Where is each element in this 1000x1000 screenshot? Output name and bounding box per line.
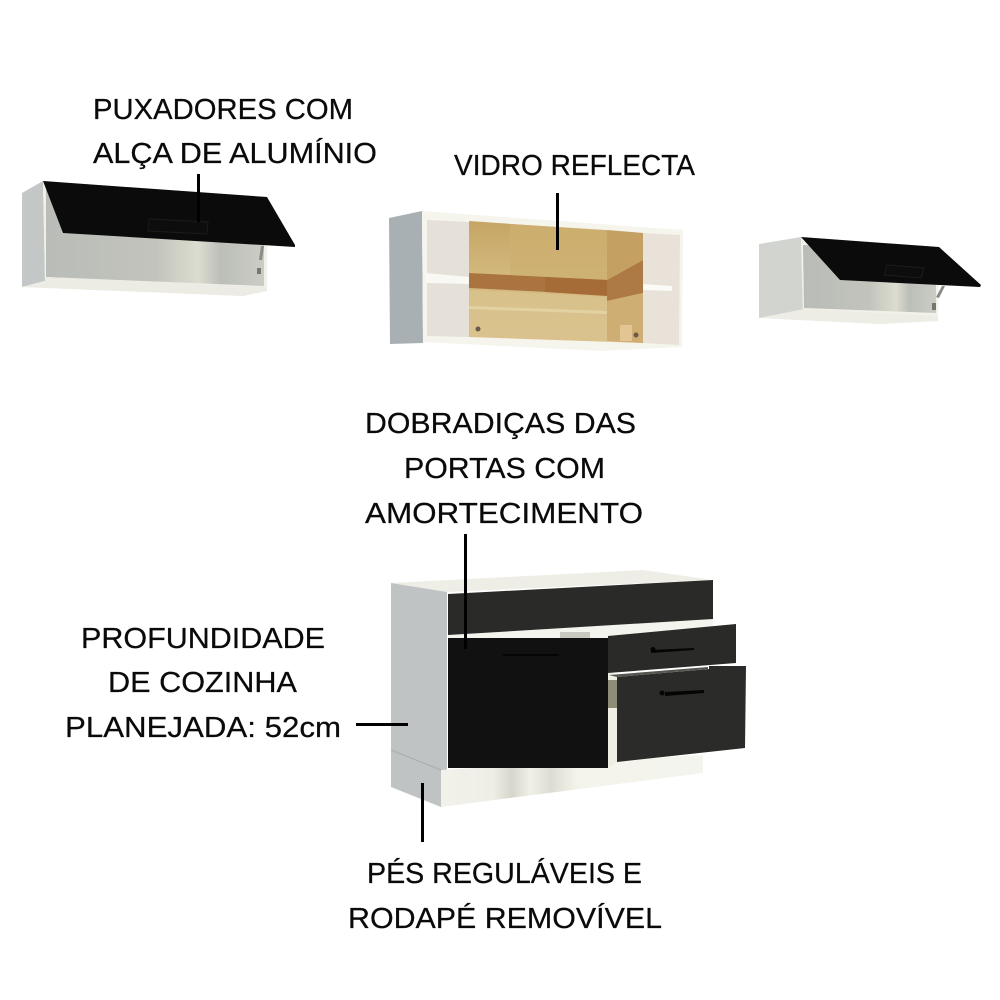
leader line: hinges	[464, 534, 467, 649]
label: hinges: PORTAS COM	[404, 453, 605, 485]
label: feet: RODAPÉ REMOVÍVEL	[348, 902, 662, 935]
label: feet	[348, 857, 662, 935]
leader line: depth	[356, 723, 408, 726]
label: handles: ALÇA DE ALUMÍNIO	[93, 137, 377, 170]
cabinet: left wall unit with lift-up door	[22, 181, 295, 296]
label: depth: DE COZINHA	[108, 667, 298, 699]
label: handles: PUXADORES COM	[93, 94, 353, 126]
cabinet: centre glass wall unit	[389, 211, 683, 351]
label: depth: PROFUNDIDADE	[81, 623, 325, 655]
label: handles	[93, 94, 377, 170]
label: glass: VIDRO REFLECTA	[454, 150, 696, 182]
leader line: glass	[556, 193, 559, 250]
cabinet: right wall unit with lift-up door	[759, 237, 981, 324]
label: hinges: AMORTECIMENTO	[365, 498, 643, 530]
leader line: handles	[197, 174, 200, 222]
label: hinges	[365, 408, 643, 530]
label: depth: PLANEJADA: 52cm	[65, 712, 341, 744]
cabinet: base unit with door and drawers	[391, 570, 746, 807]
label: feet: PÉS REGULÁVEIS E	[367, 857, 642, 890]
label: hinges: DOBRADIÇAS DAS	[365, 408, 636, 440]
leader line: feet	[421, 783, 424, 842]
label: depth	[65, 623, 341, 744]
